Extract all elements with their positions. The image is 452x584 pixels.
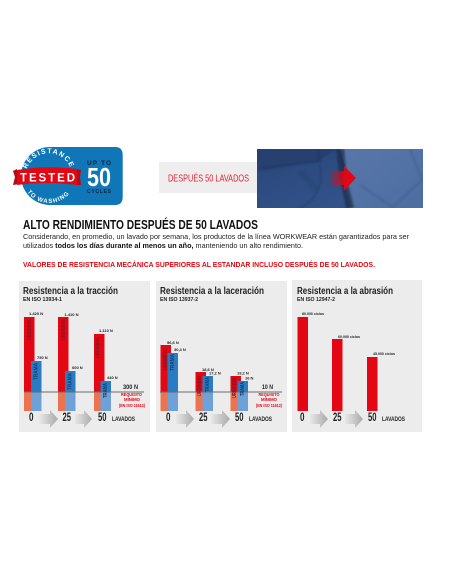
wash axis — [29, 410, 136, 428]
badge: resistance to washing tested up to 50 cycles: RESISTANCE — [22, 148, 74, 169]
bar chart: 60.000 ciclos — [338, 334, 361, 339]
wash axis — [300, 410, 406, 428]
intro paragraph — [23, 232, 410, 250]
bar chart: TRAMA — [170, 354, 176, 371]
bar chart: 17,2 N — [209, 370, 221, 376]
intro paragraph: Considerando, en promedio, un lavado por semana, los productos de la línea WORKWEAR están garantizados para ser — [23, 232, 410, 241]
minimum requirement: MÍNIMO — [261, 395, 277, 403]
bar chart: 1.410 N — [64, 312, 79, 317]
red statement: VALORES DE RESISTENCIA MECÁNICA SUPERIORES AL ESTANDAR INCLUSO DESPUÉS DE 50 LAVADOS. — [23, 260, 375, 269]
wash axis: 0 — [29, 412, 34, 424]
norm: EN ISO 13934-1 — [23, 297, 62, 303]
badge: resistance to washing tested up to 50 cycles: 50 — [87, 162, 111, 192]
bar chart: 56,6 N — [167, 340, 179, 345]
photo: denim workwear before and after, with red arrow — [257, 149, 423, 208]
bar chart: URDIMBRE — [96, 336, 102, 358]
bar chart — [24, 311, 144, 411]
wash axis: 25 — [62, 412, 71, 424]
panel: resistencia a la tracción — [19, 281, 150, 432]
badge: resistance to washing tested up to 50 cycles: TESTED — [20, 172, 75, 184]
norm: EN ISO 13937-2 — [160, 297, 198, 303]
wash axis: 0 — [166, 412, 170, 424]
bar chart: 750 N — [37, 355, 48, 360]
wash axis: 50 — [98, 412, 106, 424]
badge: resistance to washing tested up to 50 cycles — [13, 147, 123, 205]
label: después 50 lavados: DESPUÉS 50 LAVADOS — [168, 172, 249, 184]
norm: EN ISO 12947-2 — [297, 297, 335, 303]
bar chart: URDIMBRE — [27, 318, 33, 340]
bar chart: 45.000 ciclos — [373, 351, 396, 356]
bar chart: TRAMA — [240, 382, 246, 396]
wash axis: 0 — [300, 412, 304, 424]
badge: resistance to washing tested up to 50 cycles: CYCLES — [87, 189, 112, 195]
wash axis: 50 — [235, 412, 244, 424]
minimum requirement — [256, 384, 282, 409]
bar chart: 30,4 N — [174, 347, 186, 352]
bar chart: 600 N — [72, 365, 83, 370]
intro paragraph: utilizados todos los días durante al menos un año, manteniendo un alto rendimiento. — [23, 241, 303, 250]
panel heading: Resistencia a la abrasión — [297, 286, 393, 297]
minimum requirement: (EN ISO 11612) — [256, 403, 282, 409]
bar chart: 80.000 ciclos — [302, 311, 325, 316]
bar chart: URDIMBRE — [232, 376, 238, 398]
bar chart: TRAMA — [103, 383, 109, 398]
wash axis: LAVADOS — [382, 416, 406, 423]
minimum requirement: 300 N — [123, 384, 138, 391]
minimum requirement: REQUISITO — [258, 392, 280, 398]
bar chart: TRAMA — [205, 377, 211, 392]
bar chart: TRAMA — [34, 363, 40, 380]
minimum requirement: 10 N — [262, 384, 273, 391]
badge: resistance to washing tested up to 50 cycles: UP TO — [87, 160, 111, 167]
panel: resistencia a la abrasión — [292, 280, 422, 432]
bar chart: 1.110 N — [99, 328, 113, 333]
panel heading: Resistencia a la tracción — [23, 286, 118, 297]
bar chart: 19,2 N — [237, 370, 249, 376]
wash axis: 25 — [333, 412, 342, 424]
bar chart — [160, 340, 282, 411]
heading: ALTO RENDIMIENTO DESPUÉS DE 50 LAVADOS — [23, 217, 258, 232]
panel: resistencia a la laceración — [156, 281, 287, 432]
wash axis: LAVADOS — [249, 416, 273, 423]
panel heading: Resistencia a la laceración — [160, 286, 264, 297]
label: después 50 lavados — [159, 162, 257, 193]
minimum requirement: MÍNIMO — [124, 395, 140, 403]
minimum requirement: REQUISITO — [121, 392, 142, 398]
bar chart: 440 N — [107, 375, 118, 380]
wash axis — [166, 410, 273, 428]
badge: resistance to washing tested up to 50 cycles: TO WASHING — [28, 189, 68, 203]
bar chart: TRAMA — [68, 373, 74, 390]
wash axis: 25 — [199, 412, 208, 424]
wash axis: LAVADOS — [112, 416, 136, 423]
bar chart: 18,6 N — [202, 367, 214, 372]
minimum requirement — [119, 384, 145, 409]
bar chart: URDIMBRE — [61, 318, 67, 340]
bar chart: 1.420 N — [29, 311, 43, 316]
bar chart: 16 N — [245, 376, 254, 380]
minimum requirement: (EN ISO 11612) — [119, 403, 145, 409]
bar chart — [298, 311, 396, 411]
bar chart: URDIMBRE — [197, 374, 203, 396]
bar chart: URDIMBRE — [163, 348, 169, 370]
wash axis: 50 — [368, 412, 376, 424]
